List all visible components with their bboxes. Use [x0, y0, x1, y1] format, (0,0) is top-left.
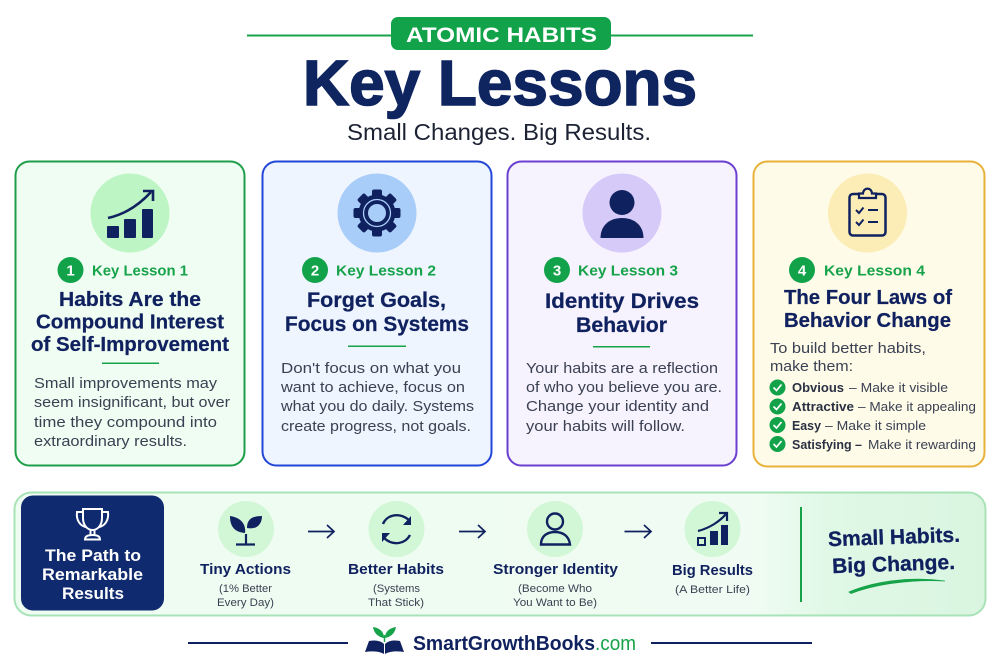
- body text: want to achieve, focus on: [280, 379, 465, 396]
- body text: [280, 360, 474, 435]
- item: attractive: [770, 398, 976, 414]
- step: big results: [672, 501, 753, 596]
- lesson number 1: Key Lesson 1: [92, 262, 188, 280]
- intro text: [770, 340, 926, 375]
- item: satisfying: Satisfying –: [792, 437, 862, 452]
- website name: .com: [595, 633, 636, 655]
- item: attractive: Attractive: [792, 399, 854, 414]
- lesson number 4: 4: [798, 262, 807, 280]
- body text: time they compound into: [34, 414, 217, 431]
- step: stronger identity: You Want to Be): [513, 597, 597, 609]
- body text: [526, 360, 722, 435]
- lesson number 4: Key Lesson 4: [824, 262, 926, 280]
- arrow: [624, 525, 651, 538]
- path heading box: Results: [62, 584, 124, 603]
- heading: [784, 287, 952, 332]
- step: tiny actions: Tiny Actions: [200, 561, 291, 578]
- slogan: Small Habits.: [828, 524, 960, 551]
- heading: Focus on Systems: [285, 313, 469, 336]
- slogan: [828, 524, 960, 594]
- item: obvious: – Make it visible: [849, 380, 948, 395]
- heading: Habits Are the: [59, 289, 201, 311]
- body text: of who you believe you are.: [526, 379, 722, 396]
- lesson number 1: [58, 257, 188, 283]
- intro text: make them:: [770, 358, 853, 375]
- arrow: [308, 525, 334, 538]
- lesson number 4: [789, 257, 926, 283]
- lesson number 2: [302, 257, 436, 283]
- swoosh: [849, 579, 945, 594]
- badge: Atomic Habits: [391, 17, 611, 50]
- body text: [34, 375, 230, 450]
- panel: key lesson 2: [262, 162, 492, 466]
- icon: clipboard checklist: [828, 174, 907, 252]
- path heading box: Remarkable: [42, 565, 143, 584]
- lesson number 2: Key Lesson 2: [336, 262, 436, 280]
- footer: [188, 627, 812, 655]
- step: better habits: That Stick): [368, 597, 424, 609]
- panel: path to remarkable results: [14, 492, 986, 616]
- body text: what you do daily. Systems: [280, 398, 474, 415]
- panel: key lesson 3: [508, 162, 736, 466]
- step: stronger identity: [493, 501, 619, 609]
- body text: Small improvements may: [34, 375, 218, 392]
- path heading box: The Path to: [45, 546, 141, 565]
- step: tiny actions: Every Day): [217, 597, 274, 609]
- heading: Forget Goals,: [307, 289, 446, 312]
- body text: extraordinary results.: [34, 433, 187, 450]
- checklist: [770, 380, 976, 452]
- lesson number 2: 2: [311, 262, 319, 280]
- header rule: [247, 34, 753, 36]
- body text: create progress, not goals.: [281, 418, 471, 435]
- icon: gear: [338, 174, 416, 252]
- heading: Behavior Change: [784, 310, 951, 332]
- step: stronger identity: Stronger Identity: [493, 561, 619, 578]
- lesson number 3: 3: [553, 262, 561, 280]
- step: tiny actions: (1% Better: [219, 583, 272, 595]
- header: [247, 17, 753, 145]
- item: satisfying: [770, 436, 976, 452]
- step: big results: (A Better Life): [675, 584, 750, 596]
- lesson number 3: Key Lesson 3: [578, 262, 678, 280]
- heading: The Four Laws of: [784, 287, 952, 309]
- body text: Change your identity and: [526, 398, 709, 415]
- icon: trophy: [77, 509, 108, 540]
- icon: growth chart: [90, 174, 170, 252]
- body text: Don't focus on what you: [281, 360, 461, 377]
- step: better habits: [348, 501, 444, 609]
- path heading box: [21, 496, 164, 610]
- step: stronger identity: (Become Who: [518, 583, 592, 595]
- item: obvious: Obvious: [792, 380, 844, 395]
- badge: Atomic Habits: ATOMIC HABITS: [406, 24, 597, 47]
- heading: [545, 290, 699, 337]
- body text: seem insignificant, but over: [34, 394, 230, 411]
- lesson number 1: 1: [66, 262, 75, 280]
- body text: your habits will follow.: [526, 418, 685, 435]
- heading: [285, 289, 469, 336]
- lesson number 3: [544, 257, 678, 283]
- panel: key lesson 1: [16, 162, 244, 466]
- item: satisfying: Make it rewarding: [868, 437, 976, 452]
- title: Key Lessons: [303, 47, 697, 119]
- heading: Behavior: [576, 314, 667, 337]
- website name: SmartGrowthBooks: [413, 633, 595, 655]
- slogan: Big Change.: [832, 551, 955, 578]
- item: attractive: – Make it appealing: [858, 399, 976, 414]
- logo: book and sprout: [365, 627, 404, 654]
- heading: [31, 289, 229, 356]
- item: easy: Easy: [792, 418, 822, 433]
- step: better habits: (Systems: [373, 583, 421, 595]
- subtitle: Small Changes. Big Results.: [347, 119, 651, 145]
- item: obvious: [770, 380, 948, 396]
- body text: Your habits are a reflection: [526, 360, 718, 377]
- arrow: [459, 525, 485, 538]
- step: tiny actions: [200, 501, 291, 609]
- step: big results: Big Results: [672, 562, 753, 579]
- step: better habits: Better Habits: [348, 561, 444, 578]
- icon: person: [582, 174, 662, 252]
- heading: Identity Drives: [545, 290, 699, 313]
- heading: Compound Interest: [36, 312, 224, 334]
- item: easy: [770, 417, 926, 433]
- item: easy: – Make it simple: [825, 418, 926, 433]
- intro text: To build better habits,: [770, 340, 926, 357]
- panel: key lesson 4: [754, 162, 984, 466]
- heading: of Self-Improvement: [31, 334, 229, 356]
